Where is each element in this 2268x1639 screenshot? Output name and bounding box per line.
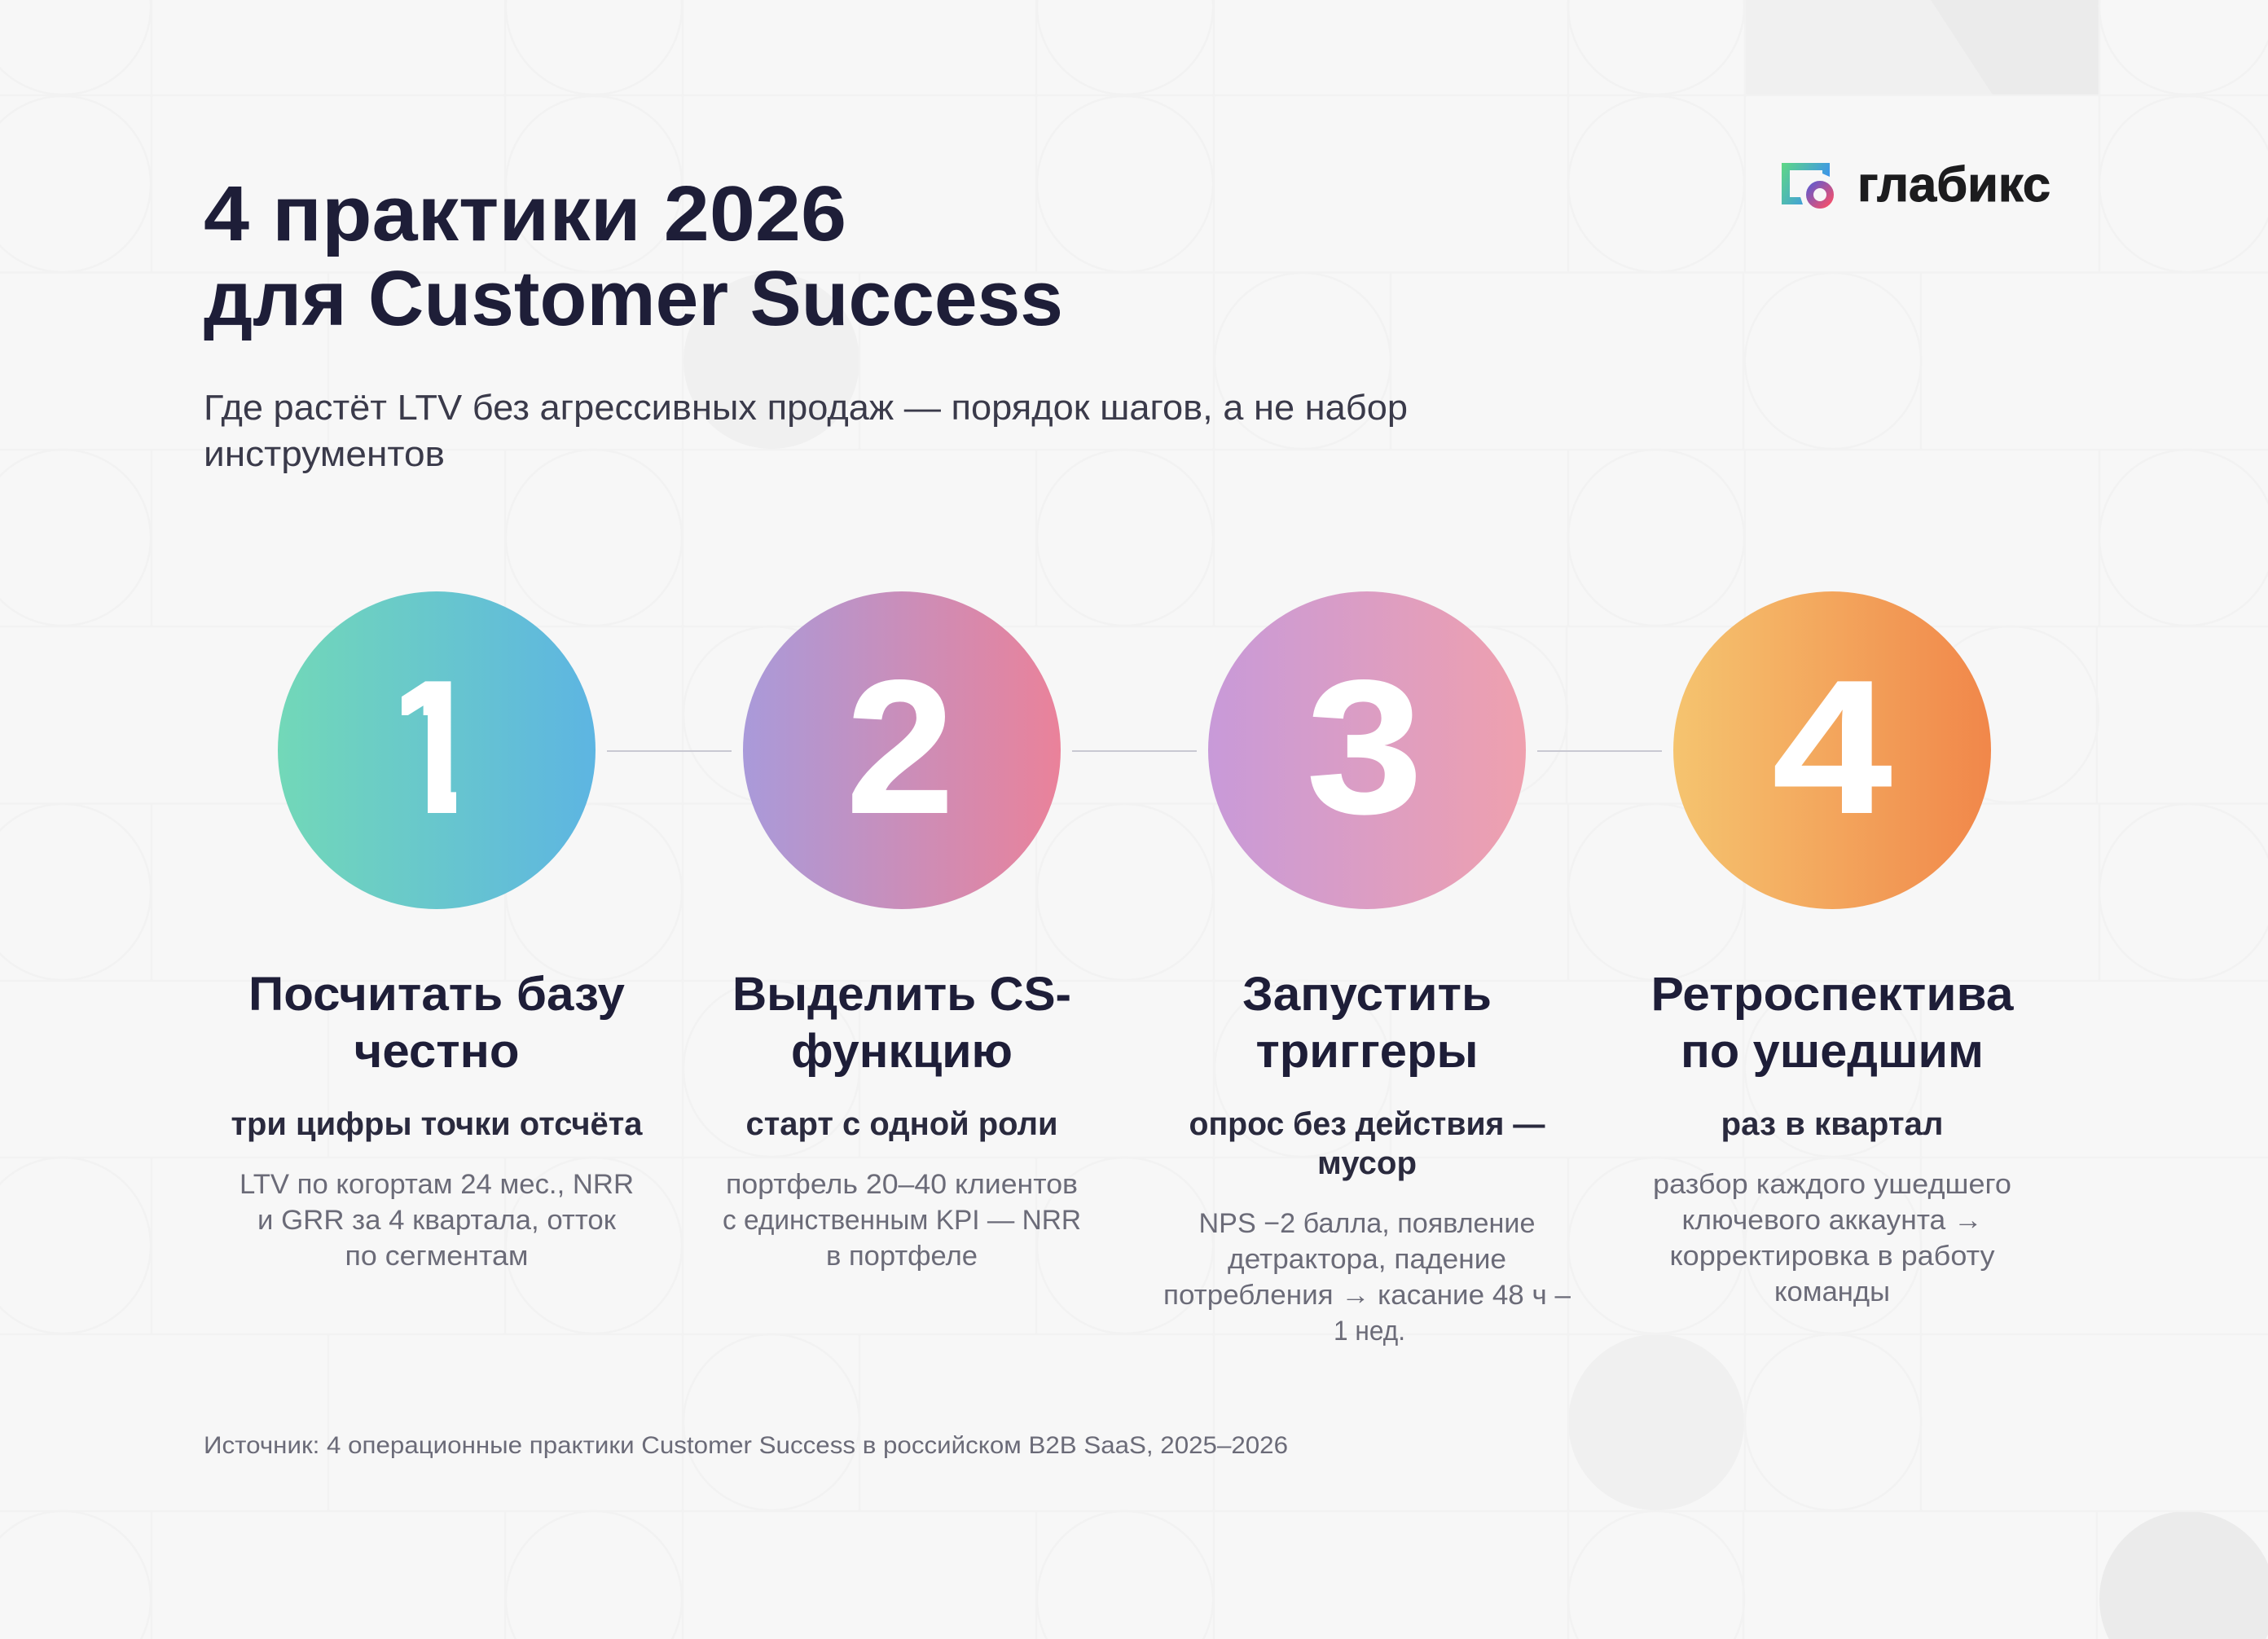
step 1 heading: Посчитать базу bbox=[248, 968, 625, 1021]
step 1 description: по сегментам bbox=[345, 1241, 528, 1272]
step 4 description bbox=[1653, 1169, 2011, 1307]
step 1 description: LTV по когортам 24 мес., NRR bbox=[240, 1169, 634, 1200]
step 2 description: в портфеле bbox=[826, 1241, 978, 1272]
source note: Источник: 4 операционные практики Customer Success в российском B2B SaaS, 2025–2026 bbox=[204, 1432, 1288, 1459]
step 2 bbox=[723, 591, 1081, 1272]
circle number 1: 1 bbox=[380, 642, 486, 853]
step 4 description: корректировка в работу bbox=[1670, 1241, 1994, 1272]
step 1 bbox=[231, 591, 643, 1272]
step 4 subheading: раз в квартал bbox=[1721, 1106, 1944, 1142]
step 2 description bbox=[723, 1169, 1081, 1272]
step 1 heading: честно bbox=[354, 1025, 520, 1078]
step 3 subheading bbox=[1189, 1106, 1545, 1181]
title bbox=[204, 170, 1063, 342]
circle number 3 bbox=[1208, 591, 1526, 909]
logo: глабикс bbox=[1782, 157, 2050, 212]
step 4 heading: по ушедшим bbox=[1681, 1025, 1984, 1078]
icon: logo frame and ring bbox=[1782, 163, 1837, 212]
step 4 description: команды bbox=[1774, 1276, 1890, 1307]
step 4 heading bbox=[1650, 968, 2014, 1078]
step 3 description: потребления → касание 48 ч – bbox=[1163, 1280, 1571, 1311]
step 4 description: разбор каждого ушедшего bbox=[1653, 1169, 2011, 1200]
title: для Customer Success bbox=[204, 255, 1063, 342]
subtitle: инструментов bbox=[204, 434, 445, 474]
connector 3-4 bbox=[1537, 750, 1662, 752]
step 1 subheading: три цифры точки отсчёта bbox=[231, 1106, 643, 1142]
step 2 subheading: старт с одной роли bbox=[746, 1106, 1057, 1142]
connector 1-2 bbox=[607, 750, 732, 752]
step 2 description: с единственным KPI — NRR bbox=[723, 1205, 1081, 1236]
step 2 heading bbox=[732, 968, 1071, 1078]
subtitle bbox=[204, 388, 1408, 474]
step 3 heading: Запустить bbox=[1242, 968, 1492, 1021]
circle number 1 bbox=[278, 591, 596, 909]
step 1 heading bbox=[248, 968, 625, 1078]
step 3 subheading: мусор bbox=[1317, 1145, 1417, 1181]
step 3 heading bbox=[1242, 968, 1492, 1078]
step 4 heading: Ретроспектива bbox=[1650, 968, 2014, 1021]
step 3 description bbox=[1163, 1208, 1571, 1347]
logo wordmark: глабикс bbox=[1857, 157, 2050, 212]
circle number 2 bbox=[743, 591, 1061, 909]
step 1 description: и GRR за 4 квартала, отток bbox=[257, 1205, 617, 1236]
connector 2-3 bbox=[1072, 750, 1197, 752]
step 4 bbox=[1650, 591, 2014, 1307]
step 2 heading: Выделить CS- bbox=[732, 968, 1071, 1021]
step 3 heading: триггеры bbox=[1256, 1025, 1478, 1078]
step 3 description: NPS −2 балла, появление bbox=[1199, 1208, 1535, 1239]
step 3 description: детрактора, падение bbox=[1228, 1244, 1506, 1275]
step 2 heading: функцию bbox=[791, 1025, 1013, 1078]
step 4 description: ключевого аккаунта → bbox=[1681, 1205, 1983, 1236]
subtitle: Где растёт LTV без агрессивных продаж — порядок шагов, а не набор bbox=[204, 388, 1408, 428]
step 3 bbox=[1163, 591, 1571, 1347]
step 3 description: 1 нед. bbox=[1334, 1316, 1405, 1347]
circle number 2: 2 bbox=[846, 642, 954, 853]
circle number 4: 4 bbox=[1773, 642, 1892, 853]
step 1 description bbox=[240, 1169, 634, 1272]
step 2 description: портфель 20–40 клиентов bbox=[726, 1169, 1078, 1200]
circle number 3: 3 bbox=[1307, 642, 1422, 853]
title: 4 практики 2026 bbox=[204, 170, 846, 257]
step 3 subheading: опрос без действия — bbox=[1189, 1106, 1545, 1142]
circle number 4 bbox=[1673, 591, 1991, 909]
